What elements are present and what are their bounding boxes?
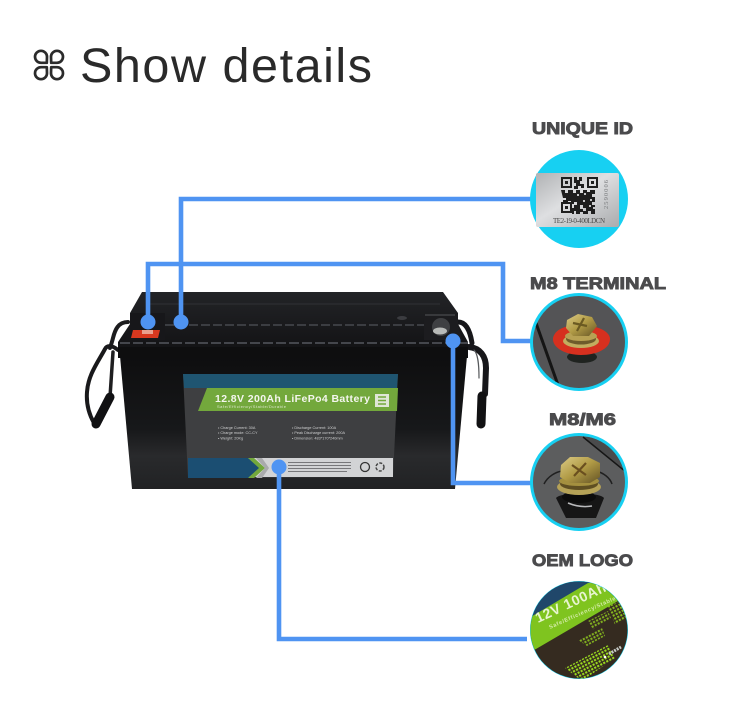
- icon: four loops: [35, 51, 63, 79]
- photo: red terminal bolt: [533, 296, 625, 388]
- label green banner: [198, 388, 398, 411]
- label specs right: • Dimension: 483*170*240mm: [292, 436, 343, 440]
- panel: M8/M6: [530, 410, 628, 531]
- line: M8 terminal: [148, 264, 532, 341]
- label teal strip: [183, 374, 398, 388]
- panel: M8 terminal: [530, 274, 666, 391]
- label logo: [375, 394, 389, 407]
- label specs right: [292, 426, 346, 440]
- right rope handle: [458, 322, 486, 424]
- black terminal: [424, 314, 462, 340]
- panel: OEM logo: [529, 551, 633, 681]
- label banner text: 12.8V 200Ah LiFePo4 Battery: [215, 393, 370, 405]
- line: OEM logo: [279, 467, 527, 639]
- label specs right: • Discharge Current: 100A: [292, 426, 337, 430]
- heading: M8/M6: [549, 410, 616, 429]
- battery body: [120, 356, 467, 489]
- line: unique id: [181, 199, 532, 322]
- battery label: Safe/Efficiency/Stable/Durable: [217, 404, 287, 409]
- label footer: [188, 458, 393, 478]
- cyan circle: [530, 150, 628, 248]
- title: [35, 39, 372, 93]
- heading: M8 TERMINAL: [530, 274, 666, 293]
- line: M8/M6: [453, 341, 532, 483]
- label specs left: • Charge Current: 30A: [218, 426, 256, 430]
- battery: [87, 119, 666, 681]
- heading: OEM LOGO: [532, 551, 633, 570]
- cyan ring: [530, 581, 628, 679]
- photo: black terminal bolt: [533, 436, 625, 528]
- label specs left: • Weight: 20Kg: [218, 436, 243, 440]
- tag serial: TE2-19-0-400LDCN: [553, 217, 605, 225]
- printed dots: [565, 601, 628, 681]
- left rope handle: [87, 322, 128, 424]
- metal tag: [536, 173, 619, 227]
- label specs left: [218, 426, 258, 440]
- photo: label close-up: [529, 579, 628, 681]
- cyan ring: [530, 293, 628, 391]
- heading: UNIQUE ID: [532, 119, 633, 138]
- icon: QR code: [561, 177, 598, 214]
- photo: label close-up: Safe/Efficiency/Stable: [548, 596, 617, 631]
- cyan ring: [530, 433, 628, 531]
- heading text: Show details: [80, 39, 372, 93]
- battery label: [183, 374, 398, 478]
- battery lid: [118, 292, 468, 358]
- photo: label close-up: 12V 100Ah: [533, 579, 608, 626]
- panel: unique id: 2590006: [603, 179, 610, 209]
- red terminal: [125, 313, 165, 340]
- connector dots: [140, 314, 460, 474]
- label specs right: • Peak Discharge current: 200A: [292, 431, 346, 435]
- panel: unique id: [530, 119, 633, 248]
- connector lines: [148, 199, 532, 639]
- label specs left: • Charge mode: CC-CY: [218, 431, 258, 435]
